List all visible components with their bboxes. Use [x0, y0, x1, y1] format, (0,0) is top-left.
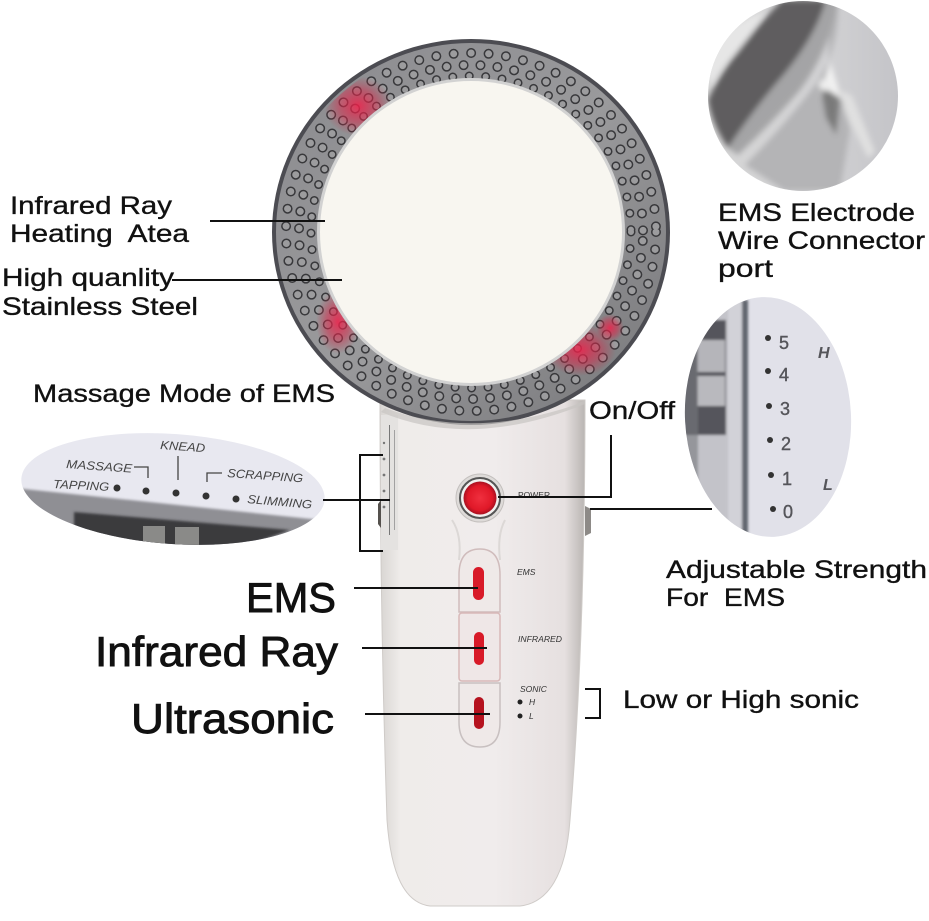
device body	[272, 39, 670, 906]
printed labels on device: INFRARED	[518, 634, 562, 644]
callout: EMS mode oval: TAPPING	[53, 477, 109, 494]
callout: EMS mode oval: SCRAPPING	[227, 466, 304, 485]
label: infrared ray heating area: Heating Atea	[10, 220, 189, 248]
button: ultrasonic	[459, 683, 500, 747]
label: adjustable strength: Adjustable Strength	[666, 556, 927, 584]
label: stainless steel	[2, 264, 342, 321]
label: infrared ray heating area: Infrared Ray	[10, 192, 173, 220]
label: infrared ray heating area	[10, 192, 325, 248]
printed labels on device: SONIC	[520, 684, 548, 694]
label: adjustable strength	[666, 556, 927, 612]
side print marks	[383, 425, 395, 535]
callout: strength dial: 5	[779, 333, 789, 353]
infrared glow	[316, 76, 624, 376]
label: stainless steel: High quanlity	[2, 264, 175, 292]
label: stainless steel: Stainless Steel	[2, 293, 198, 321]
label: Infrared Ray: Infrared Ray	[95, 628, 338, 675]
label: EMS: EMS	[246, 574, 336, 621]
callout: EMS mode oval: KNEAD	[160, 438, 206, 455]
label: massage mode heading: Massage Mode of EMS	[33, 380, 335, 408]
mode slider on side	[378, 500, 381, 528]
callout: EMS mode oval: SLIMMING	[247, 492, 313, 512]
label: connector port: EMS Electrode	[718, 199, 915, 227]
bracket: mode selector	[323, 455, 390, 551]
label: connector port: Wire Connector	[718, 227, 925, 255]
handle	[380, 400, 585, 906]
printed labels on device	[517, 490, 562, 721]
callout: strength dial: 4	[779, 365, 789, 385]
button: EMS	[459, 549, 500, 612]
label: connector port: port	[718, 255, 773, 283]
callout: strength dial	[679, 293, 857, 541]
strength slider on side	[585, 506, 591, 536]
head shadow on handle	[381, 400, 585, 429]
label: connector port	[718, 199, 925, 283]
callout: strength dial: 1	[782, 469, 792, 489]
printed labels on device: L	[529, 711, 534, 721]
line to strength	[590, 508, 712, 510]
label: adjustable strength: For EMS	[666, 584, 785, 612]
callout: EMS mode oval: MASSAGE	[66, 457, 134, 476]
label: low or high sonic	[585, 686, 859, 718]
printed labels on device: POWER	[518, 490, 550, 500]
label: Ultrasonic: Ultrasonic	[131, 695, 334, 742]
callout: connector port	[700, 0, 898, 191]
printed labels on device: H	[529, 697, 536, 707]
control recess	[452, 520, 505, 560]
bezel	[317, 78, 625, 386]
label: on/off: On/Off	[589, 397, 675, 425]
label: low or high sonic: Low or High sonic	[623, 686, 859, 714]
callout: EMS mode oval	[22, 433, 324, 545]
callout: strength dial: 0	[783, 502, 793, 522]
printed labels on device: EMS	[517, 567, 536, 577]
button: infrared	[459, 613, 500, 681]
callout: strength dial: L	[823, 477, 833, 494]
label: on/off	[498, 397, 675, 497]
callout: strength dial: H	[818, 345, 830, 362]
power button	[456, 474, 504, 522]
callout: strength dial: 2	[781, 434, 791, 454]
head ring	[272, 39, 670, 425]
callout: strength dial: 3	[780, 399, 790, 419]
